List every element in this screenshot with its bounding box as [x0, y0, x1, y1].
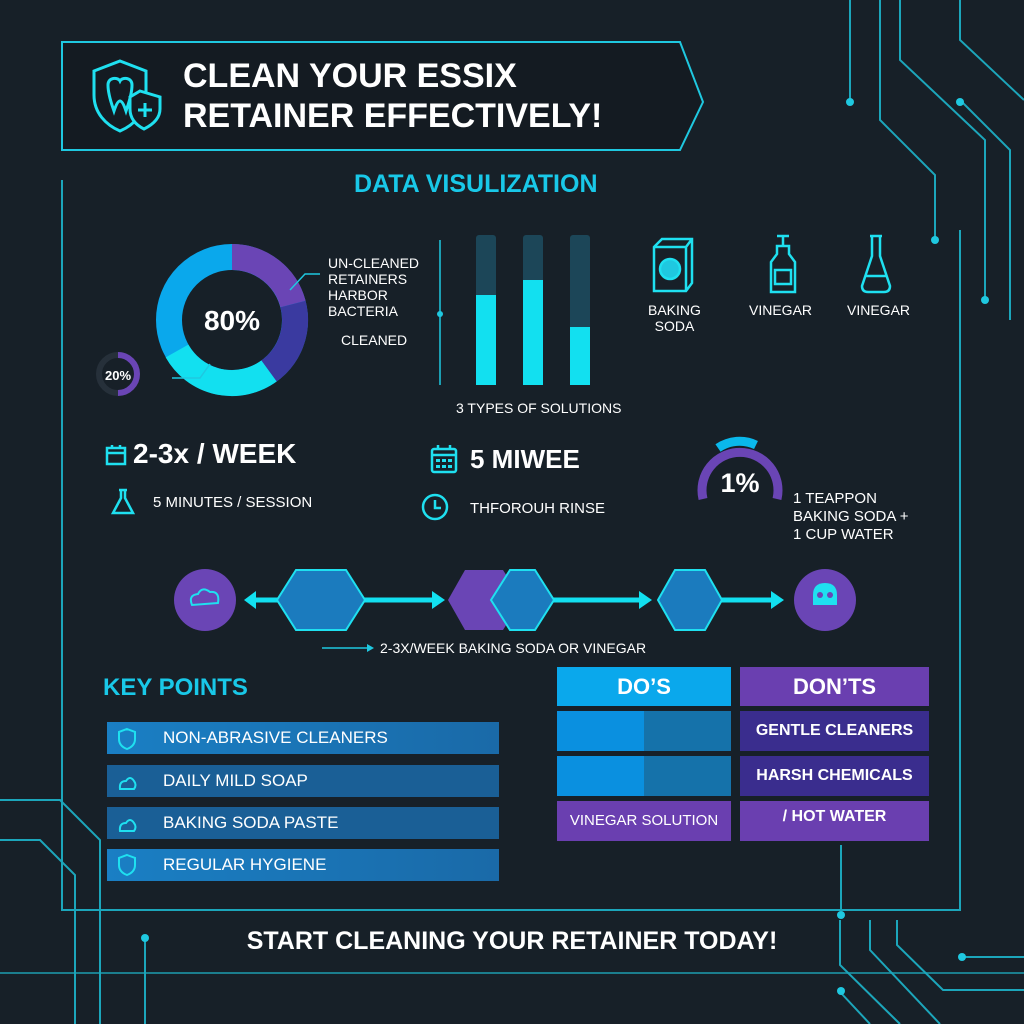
icons: solutions: SODA: [655, 318, 694, 334]
dos and donts table: GENTLE CLEANERS: [756, 722, 913, 739]
stat: 5 miwee: 5 MIWEE: [470, 444, 580, 474]
header banner: [61, 41, 704, 151]
dos and donts table: / HOT WATER: [783, 808, 886, 825]
section heading: DATA VISULIZATION: [354, 170, 598, 198]
key points heading: KEY POINTS: [103, 674, 248, 701]
icons: solutions: VINEGAR: [847, 302, 910, 318]
text: 1 CUP WATER: [793, 526, 894, 543]
key points list: BAKING SODA PASTE: [163, 813, 338, 832]
title: [183, 57, 602, 135]
text: 1 TEAPPON: [793, 490, 877, 507]
donut chart: 80%: [204, 305, 260, 336]
icon: tooth shield: [92, 59, 162, 133]
stat: rinse: THFOROUH RINSE: [470, 500, 605, 517]
title: CLEAN YOUR ESSIX: [183, 57, 517, 95]
dos and donts table: VINEGAR SOLUTION: [570, 812, 718, 829]
dos and donts table: HARSH CHEMICALS: [756, 767, 913, 784]
dos and donts table: [557, 667, 929, 841]
text: 3 TYPES OF SOLUTIONS: [456, 400, 621, 416]
bar chart: [437, 235, 590, 385]
donut labels: HARBOR: [328, 287, 388, 303]
text: CLEANED: [341, 332, 407, 348]
donut chart: 20%: [105, 368, 131, 383]
footer call to action: START CLEANING YOUR RETAINER TODAY!: [247, 927, 777, 955]
stat: duration: [111, 488, 312, 514]
gauge 1%: 1%: [720, 468, 760, 498]
key points list: REGULAR HYGIENE: [163, 855, 326, 874]
icons: solutions: VINEGAR: [749, 302, 812, 318]
gauge 1%: [698, 436, 782, 500]
icons: solutions: BAKING: [648, 302, 701, 318]
key points list: DAILY MILD SOAP: [163, 771, 308, 790]
stat: duration: 5 MINUTES / SESSION: [153, 494, 312, 511]
key points list: NON-ABRASIVE CLEANERS: [163, 728, 388, 747]
donut labels: BACTERIA: [328, 303, 398, 319]
dos and donts table: DO’S: [617, 674, 671, 699]
title: RETAINER EFFECTIVELY!: [183, 97, 602, 135]
text: BAKING SODA +: [793, 508, 908, 525]
donut chart: [96, 244, 320, 396]
timeline caption: 2-3X/WEEK BAKING SODA OR VINEGAR: [380, 640, 646, 656]
donut labels: UN-CLEANED: [328, 255, 419, 271]
key points list: [107, 722, 499, 881]
icons: solutions: [648, 234, 910, 334]
timeline flow: [174, 569, 856, 631]
donut labels: [328, 255, 419, 319]
donut labels: RETAINERS: [328, 271, 407, 287]
stat: frequency: 2-3x / WEEK: [133, 438, 296, 469]
dos and donts table: DON’TS: [793, 674, 876, 699]
stat: rinse: [422, 494, 605, 520]
